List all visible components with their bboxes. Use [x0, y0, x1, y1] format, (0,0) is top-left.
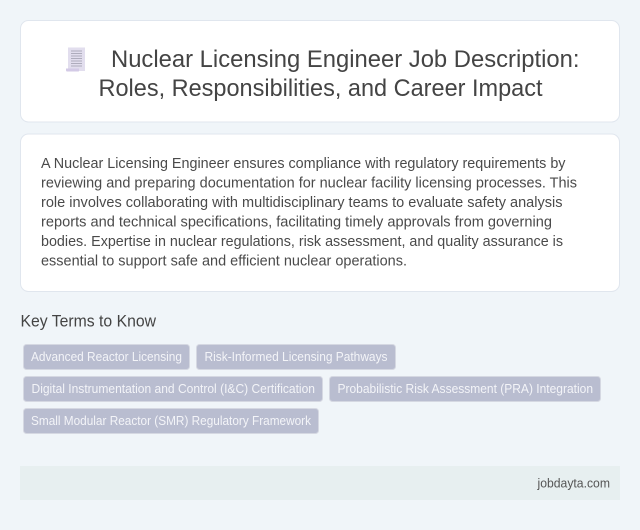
tag: probabilistic risk assessment: [330, 376, 600, 402]
panel: description card: [20, 134, 620, 292]
footer source text: jobdayta.com: [537, 476, 610, 490]
title: Nuclear Licensing Engineer Job Description:: [111, 46, 580, 73]
heading: key terms: Key Terms to Know: [20, 312, 156, 330]
footer: [20, 466, 620, 500]
description text: reviewing and preparing documentation for nuclear facility licensing processes. This: [41, 174, 577, 192]
tag: advanced reactor licensing: [24, 344, 190, 370]
title: Roles, Responsibilities, and Career Impact: [98, 75, 543, 102]
description text: essential to support safe and efficient nuclear operations.: [41, 252, 407, 270]
description text: A Nuclear Licensing Engineer ensures compliance with regulatory requirements by: [41, 155, 566, 172]
description text: reports and technical specifications, facilitating timely approvals from governing: [41, 214, 552, 230]
panel: title card: [20, 20, 620, 122]
tag: small modular reactor: [24, 408, 318, 434]
tag: risk-informed licensing pathways: [196, 344, 396, 370]
tag: risk-informed licensing pathways: Risk-Informed Licensing Pathways: [204, 350, 388, 364]
icon: document scroll: [66, 48, 85, 72]
description text: role involves collaborating with multidisciplinary teams to evaluate safety analysis: [41, 194, 562, 211]
tag list: key terms: [24, 344, 600, 434]
title: [98, 46, 580, 102]
tag: small modular reactor: Small Modular Reactor (SMR) Regulatory Framework: [31, 414, 312, 428]
tag: probabilistic risk assessment: Probabilistic Risk Assessment (PRA) Integration: [338, 382, 593, 396]
tag: advanced reactor licensing: Advanced Reactor Licensing: [31, 350, 182, 364]
description text: [41, 155, 577, 270]
tag: digital instrumentation and control: [24, 376, 322, 402]
tag: digital instrumentation and control: Digital Instrumentation and Control (I&C) Certification: [32, 382, 315, 396]
description text: bodies. Expertise in nuclear regulations, risk assessment, and quality assurance is: [41, 233, 563, 250]
